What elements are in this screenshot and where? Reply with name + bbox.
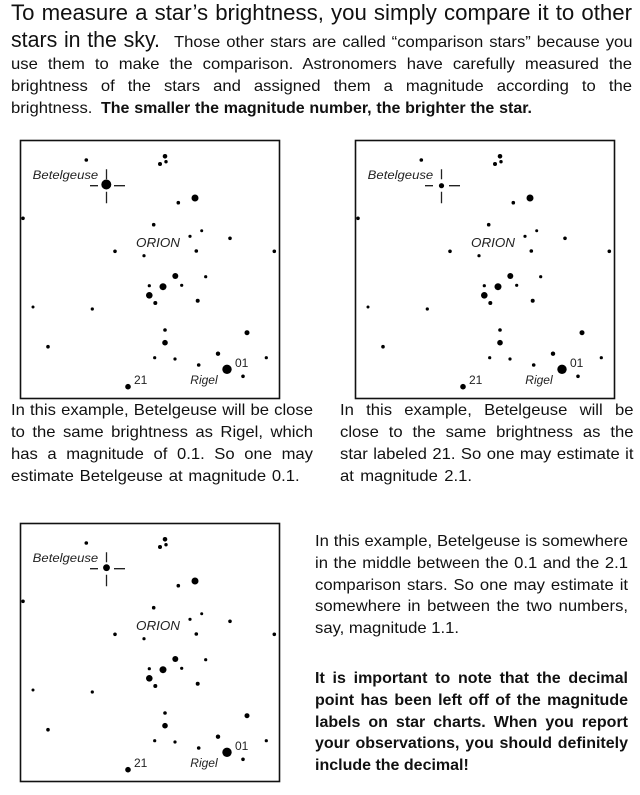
caption: third example: in the middle between the 0.1 and the 2.1 bbox=[315, 554, 628, 572]
star chart: Betelgeuse between the two comparison stars: 21 bbox=[134, 756, 148, 770]
star chart: Betelgeuse as faint as star 21: ORION bbox=[471, 235, 516, 250]
intro text: brightness. bbox=[11, 100, 92, 117]
caption: first example: In this example, Betelgeuse will be close bbox=[11, 402, 313, 418]
star chart: Betelgeuse between the two comparison stars: 01 bbox=[235, 739, 249, 753]
intro text bbox=[11, 0, 632, 117]
star chart: Betelgeuse as faint as star 21: Betelgeuse bbox=[368, 168, 434, 182]
note: decimal point on magnitude labels: It is important to note that the decimal bbox=[315, 670, 628, 686]
caption: second example bbox=[340, 402, 634, 484]
caption: second example: star labeled 21. So one may estimate it bbox=[340, 446, 633, 462]
star chart: Betelgeuse as bright as Rigel: 21 bbox=[134, 373, 148, 387]
note: decimal point on magnitude labels: point has been left off of the magnitude bbox=[315, 692, 628, 708]
star chart: Betelgeuse as bright as Rigel: Rigel bbox=[190, 373, 218, 387]
caption: third example: say, magnitude 1.1. bbox=[315, 620, 459, 636]
caption: third example: In this example, Betelgeuse is somewhere bbox=[315, 533, 628, 550]
star chart: Betelgeuse between the two comparison stars: Betelgeuse bbox=[33, 551, 99, 565]
intro text: use them to make the comparison. Astronomers have carefully measured the bbox=[11, 56, 632, 73]
intro text: Those other stars are called “comparison stars” because you bbox=[174, 34, 632, 51]
star chart: Betelgeuse as bright as Rigel: Betelgeuse bbox=[33, 168, 99, 182]
star chart: Betelgeuse between the two comparison stars: Rigel bbox=[190, 756, 218, 770]
star chart: Betelgeuse as bright as Rigel: 01 bbox=[235, 356, 249, 370]
star chart: Betelgeuse between the two comparison stars: ORION bbox=[136, 618, 181, 633]
intro text: stars in the sky. bbox=[11, 27, 160, 52]
caption: first example: estimate Betelgeuse at magnitude 0.1. bbox=[11, 468, 300, 484]
intro text: The smaller the magnitude number, the brighter the star. bbox=[101, 100, 532, 117]
caption: second example: at magnitude 2.1. bbox=[340, 468, 472, 484]
caption: first example bbox=[11, 402, 313, 484]
star chart: Betelgeuse as faint as star 21: Rigel bbox=[525, 373, 553, 387]
star chart: Betelgeuse as faint as star 21: 21 bbox=[469, 373, 483, 387]
caption: third example: comparison stars. So one may estimate it bbox=[315, 576, 628, 594]
caption: first example: has a magnitude of 0.1. So one may bbox=[11, 446, 313, 462]
note: decimal point on magnitude labels: labels on star charts. When you report bbox=[315, 714, 628, 730]
caption: second example: In this example, Betelgeuse will be bbox=[340, 402, 633, 418]
intro text: brightness of the stars and assigned them a magnitude according to the bbox=[11, 78, 632, 95]
caption: second example: close to the same brightness as the bbox=[340, 424, 633, 440]
note: decimal point on magnitude labels: include the decimal! bbox=[315, 757, 469, 774]
star chart: Betelgeuse as bright as Rigel: ORION bbox=[136, 235, 181, 250]
caption: first example: to the same brightness as Rigel, which bbox=[11, 424, 313, 440]
intro text: To measure a star’s brightness, you simply compare it to other bbox=[11, 0, 632, 25]
star chart: Betelgeuse as faint as star 21: 01 bbox=[570, 356, 584, 370]
caption: third example: somewhere in between the two numbers, bbox=[315, 598, 628, 615]
note: decimal point on magnitude labels: your observations, you should definitely bbox=[315, 735, 628, 752]
